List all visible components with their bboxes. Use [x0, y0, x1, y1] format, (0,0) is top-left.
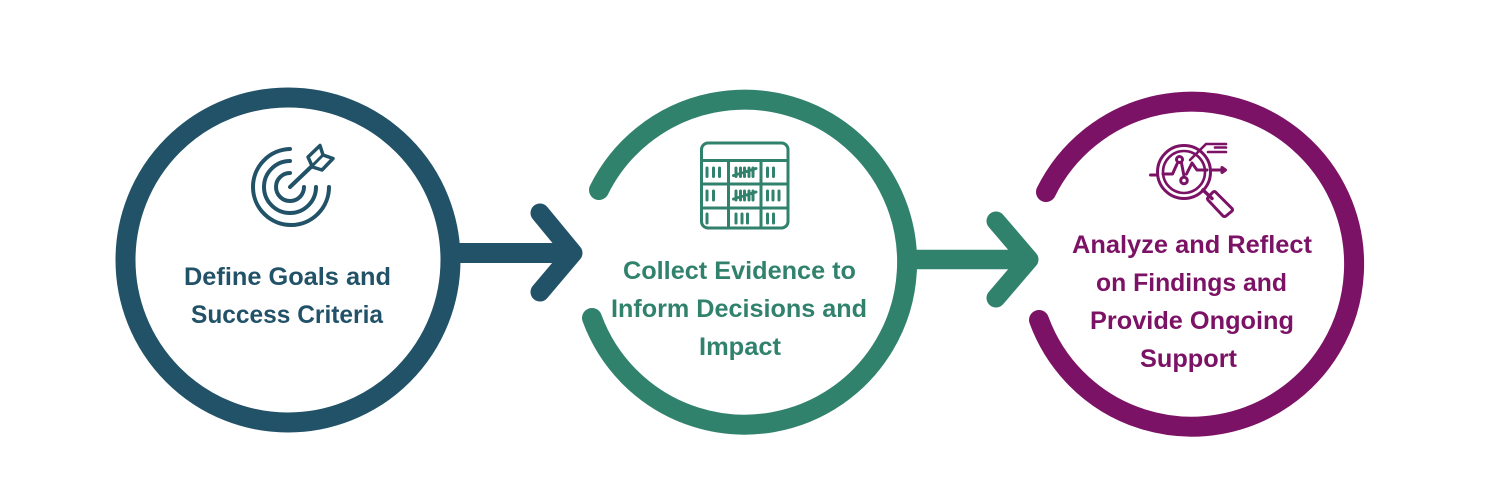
ring: analyze and reflect	[1039, 102, 1354, 427]
heading: collect evidence: Inform Decisions and	[611, 295, 867, 323]
heading: analyze and reflect: Provide Ongoing	[1090, 307, 1294, 335]
icon: magnifier over chart	[1150, 144, 1232, 216]
arrow: define to collect	[455, 213, 573, 292]
heading: analyze and reflect: Analyze and Reflect	[1072, 231, 1313, 259]
heading: define goals	[184, 263, 391, 329]
ring: define goals	[126, 98, 450, 422]
heading: collect evidence: Collect Evidence to	[623, 257, 856, 285]
heading: analyze and reflect	[1072, 231, 1313, 373]
panel: collect evidence	[592, 100, 907, 425]
heading: collect evidence: Impact	[699, 333, 782, 361]
ring: collect evidence	[592, 100, 907, 425]
panel: define goals	[126, 98, 450, 422]
heading: define goals: Success Criteria	[191, 301, 384, 329]
heading: collect evidence	[611, 257, 867, 361]
heading: define goals: Define Goals and	[184, 263, 391, 291]
panel: analyze and reflect	[1039, 102, 1354, 427]
heading: analyze and reflect: on Findings and	[1096, 269, 1287, 297]
icon: target with arrow	[253, 146, 333, 225]
heading: analyze and reflect: Support	[1140, 345, 1238, 373]
arrow: collect to analyze	[912, 221, 1029, 298]
icon: tally table	[702, 143, 788, 228]
